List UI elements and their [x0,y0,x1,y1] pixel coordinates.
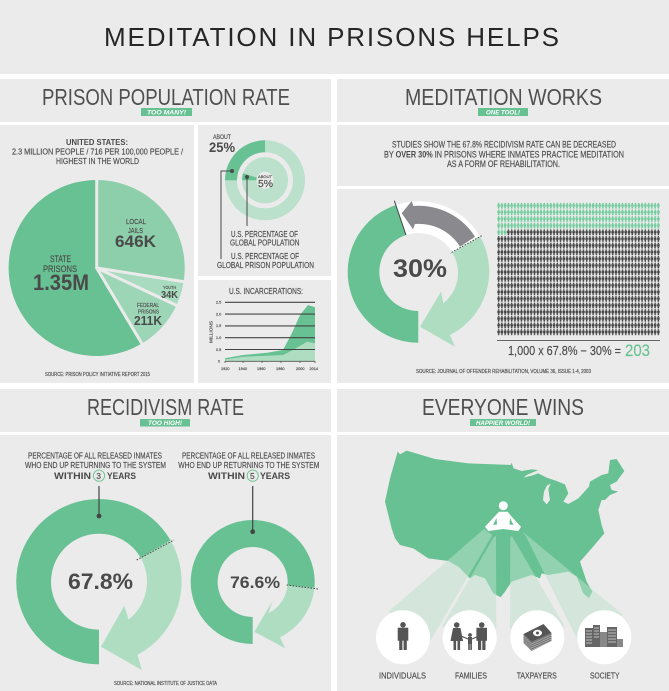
text: within 3 years: 3 [96,471,101,481]
badge: one tool: ONE TOOL! [486,110,521,117]
circle: society [577,610,631,664]
pie chart: 34K [161,290,179,301]
panel: thirty percent reduction [337,189,669,383]
leader lines [221,170,248,259]
badge: too many: TOO MANY! [147,110,187,117]
area chart: 2000 [296,367,304,371]
donut: 76.6%: 76.6% [230,573,280,592]
people grid: 1000 inmates, 203 green [497,203,660,336]
circle: individuals [376,610,430,664]
area chart: 1980 [276,367,284,371]
ring labels [217,230,314,270]
ring chart: ABOUT [258,174,273,179]
panel: meditation works heading [337,79,669,122]
text: within 3 years [25,450,166,482]
icon: money stack [524,624,552,651]
equation: 1,000 x 67.8% − 30% = [508,344,621,358]
panel: studies text [337,125,669,186]
ring chart [225,140,299,214]
text: united states summary: HIGHEST IN THE WORLD [56,156,139,166]
pie chart: STATE [50,254,71,264]
equation [497,340,660,360]
map of the United States [385,451,624,598]
circle labels [379,672,620,681]
panel: everyone wins map [337,435,669,691]
panel: pie chart of prison population [0,125,194,383]
area chart: MILLIONS [208,321,214,343]
donut: 67.8% [16,486,182,670]
panel: recidivism donuts [0,435,331,691]
label: about 25%: ABOUT [213,135,231,141]
badge: one tool [478,108,528,117]
text: within 5 years: WHO END UP RETURNING TO THE SYSTEM [178,460,319,470]
heading: MEDITATION WORKS [405,84,602,110]
equation: 203 [625,341,650,360]
heading: PRISON POPULATION RATE [42,84,290,110]
pie chart: FEDERAL [137,303,159,309]
donut arrow chart [348,201,489,347]
text block: AS A FORM OF REHABILITATION. [447,159,560,169]
text block [384,140,624,169]
text block: BY OVER 30% IN PRISONS WHERE INMATES PRACTICE MEDITATION [384,150,624,160]
pie chart: PRISONS [43,264,77,274]
area chart [208,300,318,371]
pie chart: LOCAL [126,217,146,226]
text: united states summary: 2.3 MILLION PEOPLE / 716 PER 100,000 PEOPLE / [12,146,184,156]
area chart: 1960 [257,367,265,371]
icon: meditating figure [485,501,521,531]
pie chart: PRISONS [138,310,159,316]
area chart: 1940 [238,367,247,371]
source note: SOURCE: JOURNAL OF OFFENDER REHABILITATION, VOLUME 36, ISSUE 1-4, 2003 [416,369,591,375]
icon: person [398,622,408,650]
panel: page title [0,0,669,74]
heading: EVERYONE WINS [422,394,584,420]
pie chart: 211K [134,313,163,328]
circle labels: TAXPAYERS [517,672,557,681]
source note: SOURCE: PRISON POLICY INITIATIVE REPORT 2015 [45,372,150,378]
ring labels: U.S. PERCENTAGE OF [231,230,298,239]
ring labels: GLOBAL PRISON POPULATION [217,261,314,270]
panel: US incarcerations chart [198,280,331,383]
circle labels: FAMILIES [455,672,487,681]
text: within 3 years: PERCENTAGE OF ALL RELEASED INMATES [28,450,162,460]
icon: city buildings [585,625,623,647]
text: united states summary: UNITED STATES: [66,137,128,147]
text: within 3 years: YEARS [107,471,136,482]
icon: family [450,622,487,650]
text: within 5 years: YEARS [260,471,290,482]
pie chart: 646K [115,232,157,251]
donut: 67.8%: 67.8% [68,569,133,594]
text: within 3 years: WITHIN [54,471,91,482]
circle: taxpayers [510,610,564,664]
pie chart: JAILS [128,226,143,235]
chart title: U.S. INCARCERATIONS: [229,287,303,296]
text: within 5 years: WITHIN [208,471,245,482]
badge: too high: TOO HIGH! [148,420,183,427]
donut: 76.6% [191,486,318,648]
panel: recidivism rate heading [0,389,331,432]
circle labels: INDIVIDUALS [379,672,426,681]
pie chart [9,178,186,356]
area chart: 2014 [310,367,318,371]
area chart: 1.5 [216,324,221,328]
text: united states summary [12,137,184,166]
panel: prison population rate heading [0,79,331,122]
area chart: 0.5 [216,348,221,352]
area chart: 1920 [221,367,229,371]
pie chart: 1.35M [33,270,89,295]
ring chart: 5% [258,179,273,190]
heading: RECIDIVISM RATE [87,394,244,420]
donut arrow chart: 30% [393,255,447,283]
area chart: 1.0 [216,336,221,340]
ring labels: GLOBAL POPULATION [230,238,300,248]
area chart: 2.0 [216,312,221,316]
area chart: 2.5 [216,300,221,304]
title: MEDITATION IN PRISONS HELPS [104,22,559,52]
badge: too high [140,419,190,427]
badge: too many [141,108,192,117]
text: within 5 years: PERCENTAGE OF ALL RELEASED INMATES [182,450,315,460]
panel: global percentage rings [198,125,331,276]
pie chart: YOUTH [163,285,176,290]
label: about 25%: 25% [209,139,236,155]
panel: everyone wins heading [337,389,669,432]
text: within 3 years: WHO END UP RETURNING TO THE SYSTEM [25,460,166,470]
area chart: 0 [218,360,220,364]
circle labels: SOCIETY [590,672,620,681]
badge: happier world: HAPPIER WORLD! [476,420,531,427]
text: within 5 years: 5 [250,471,255,481]
text: within 5 years [178,450,319,482]
source note: SOURCE: NATIONAL INSTITUTE OF JUSTICE DATA [114,681,218,687]
circle: families [443,610,497,664]
beams from meditator to circles [388,529,623,642]
ring labels: U.S. PERCENTAGE OF [231,252,299,261]
